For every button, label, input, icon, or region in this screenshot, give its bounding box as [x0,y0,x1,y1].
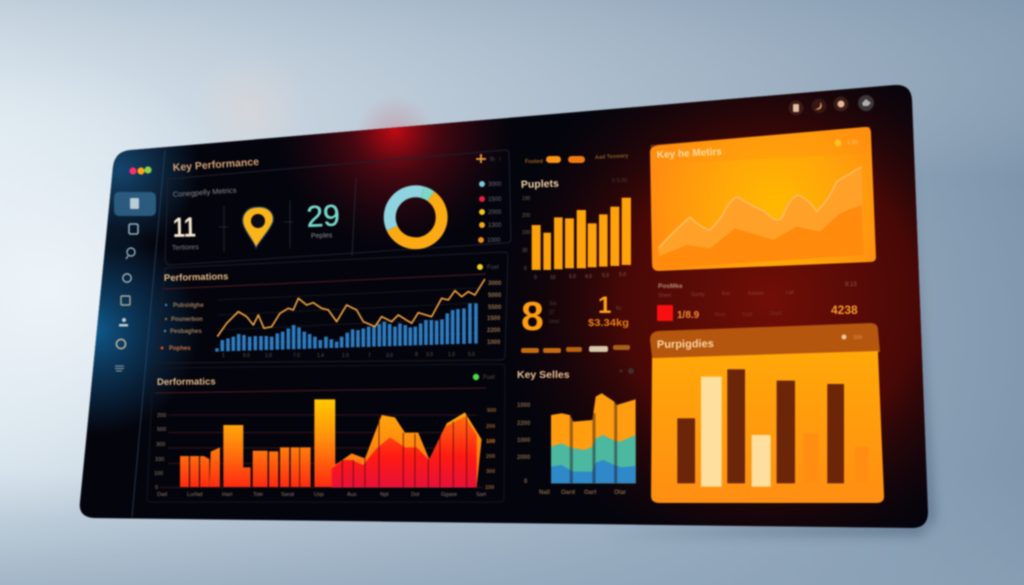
metric: 8: 8 [521,293,544,339]
y axis labels: 2000 [517,455,531,461]
y axis labels: 30 [522,248,528,254]
status: 100 [853,335,862,341]
y axis labels [487,281,502,346]
x axis labels: 7.0 [293,353,300,359]
top toolbar icons [476,154,501,163]
donut legend [478,181,502,244]
left axis labels: 0 [155,485,158,491]
left axis labels: 200 [157,413,166,419]
chart legend: Pubsidghe [173,303,204,309]
panel: performatics area and bar chart [147,364,505,502]
y axis labels [522,196,531,272]
heading: Purpigdies [657,338,714,351]
metric: 29 Peoples: 29 [306,199,341,234]
y axis labels: 2200 [487,328,501,334]
strip: positive stats: Kenner [748,291,764,297]
card: Purpigdies bar chart [650,323,884,503]
x axis labels: 3.0 [386,353,393,359]
top pill row: Aad Teswary [595,153,630,161]
strip: positive stats: PosMke [658,283,683,290]
x axis labels: 5.0 [602,273,609,279]
area layers [332,412,482,487]
nav icon: bell [123,274,131,282]
x axis labels: 0 [534,275,537,281]
left axis labels: 500 [157,427,166,433]
orange bars [180,399,335,487]
donut chart [390,191,442,243]
x axis labels: 10 [550,275,556,281]
strip: positive stats: 8:13 [845,282,857,288]
metric: 11 Territories [172,212,199,252]
x axis labels: Tole [253,492,263,498]
x axis labels: 3.0 [426,352,433,358]
x axis labels [157,492,487,498]
y axis labels: 1500 [487,316,501,322]
x axis labels: Dad [157,492,167,498]
heading: Performations [164,271,228,284]
right axis labels: 500 [487,408,496,414]
middle column [517,153,636,496]
y axis labels: 5000 [488,293,502,299]
x axis labels: 1.4 [317,353,324,359]
dashboard panel [78,84,929,529]
x axis labels: Lurfad [187,492,203,498]
x axis labels: 1.0 [265,353,272,359]
status [842,334,862,341]
metric: 8 [521,293,560,339]
status: Fuel [487,265,499,271]
mini icons [620,368,634,374]
subheading: Conegpelly Metrics [173,186,237,199]
red swatch [657,305,673,321]
y axis labels [517,403,531,485]
right axis labels: 100 [486,439,495,445]
nav icon: chart [129,224,138,234]
metric: 8: 27 [549,310,555,316]
sidebar divider [132,150,165,517]
status: Fuel [483,375,495,381]
status [477,264,499,271]
left axis labels: 100 [154,471,163,477]
x axis labels: 8 [415,352,418,358]
nav icon: clock [116,339,126,349]
nav icon: document [130,198,139,209]
top toolbar icons: ⁝ [499,157,501,163]
sidebar [114,166,156,371]
x axis labels: 1.0 [342,353,349,359]
y axis labels: 0 [524,479,528,485]
strip: positive stats: 4238 [831,303,858,317]
y axis labels: 0 [524,266,527,272]
chart legend: Pesbaghes [170,329,202,335]
right axis labels: 300 [486,469,495,475]
y axis labels: 5500 [488,305,502,311]
x axis labels: 5.0 [468,352,475,358]
top pill row: Fusted [525,159,543,165]
x axis labels: Dol [411,492,419,498]
strip: positive stats: Staft [742,312,753,318]
status [473,374,495,381]
right axis labels: 200 [486,424,495,430]
left axis labels [154,413,166,491]
top pill row [525,153,630,165]
mini legend: h 5.00 [612,178,627,184]
y axis labels: 1000 [487,340,501,346]
strip: positive stats: Esc [722,291,731,297]
strip: positive stats: Sturs [714,312,726,318]
metric: 1 $3.34kg: Fc [616,306,622,312]
x axis labels: 7 [368,353,371,359]
x axis labels: Usp [314,492,324,498]
status [834,140,858,146]
panel shadow [600,100,934,534]
strip: positive stats: Starlt [770,311,782,317]
y axis labels: 190 [522,196,531,202]
metric: 29 Peoples: Peples [311,232,333,240]
heading: Key Performance: Key Performance [172,156,260,174]
x axis labels [539,490,627,496]
x axis labels: Ggase [441,492,457,498]
heading: Key Selles: Key Selles [517,369,570,381]
y axis labels: 100 [522,230,531,236]
y axis labels: 3000 [488,281,502,287]
metric: 1 $3.34kg: 1 [598,292,611,319]
panel: category metrics [165,150,511,265]
x axis labels: 5.0 [243,353,250,359]
donut legend: 1300 [488,223,502,229]
x axis labels: 4.0 [585,274,592,280]
nav icon: image [121,296,130,305]
metric: 1 $3.34kg: $3.34kg [588,318,629,329]
blue bars and orange line [217,279,485,352]
pill row [521,345,630,353]
window dots [129,166,152,175]
x axis labels: 5.0 [569,274,576,280]
x axis labels: Npt [380,492,389,498]
y axis labels: 1000 [517,403,531,409]
metric: 11 Territories: Tertiores [172,244,199,252]
strip: positive stats: Lall [786,290,794,296]
strip: positive stats: Sheet [658,293,672,299]
heading: Key he Metirs [657,147,723,161]
x axis labels: Sarat [281,492,295,498]
metric: 8: Unst [549,319,560,325]
x axis labels: 1 [222,353,225,359]
metric: 1 $3.34kg [588,292,629,329]
x axis labels: Hart [222,492,233,498]
chart legend: Pounerbon [171,317,203,323]
x axis labels [534,272,626,281]
donut legend: 3000 [488,182,502,188]
y axis labels: 2200 [517,421,531,427]
donut legend: 1500 [488,197,502,203]
right axis labels: 100 [485,485,494,491]
x axis labels: Oart [584,490,596,496]
chart legend [160,303,204,352]
strip: positive stats [657,282,858,321]
x axis labels: Aus [347,492,357,498]
right axis labels [485,408,496,491]
right column [650,95,884,503]
icon: map pin [243,207,273,248]
donut legend: 2000 [488,210,502,216]
metric: 11 Territories: 11 [173,212,196,243]
panel: performance line and bar chart [156,252,508,363]
strip: positive stats: 1/8.9 [677,310,700,321]
x axis labels: Sart [476,492,487,498]
x axis labels: Oard [561,490,575,496]
right axis labels: 200 [486,454,495,460]
x axis labels: Olar [614,490,627,496]
amber bar chart [532,198,631,270]
heading: Derformatics [157,376,216,388]
active nav tile [114,192,156,216]
card: Key metrics area chart [650,127,876,271]
y axis labels: 1000 [517,438,531,444]
metric: 8: Sar [549,301,557,307]
strip: positive stats: Gurdy [691,292,705,298]
x axis labels: 1.0 [448,352,455,358]
x axis labels: Nall [539,490,550,496]
stacked area chart [551,393,636,483]
nav icon: menu [115,366,124,371]
left axis labels: 300 [156,442,165,448]
left axis labels: 330 [155,457,164,463]
status: 1.00 [847,140,858,146]
nav icon: user [119,318,128,326]
x axis labels: 5.0 [619,272,626,278]
x axis labels [222,352,475,359]
top toolbar icons: lh [490,157,495,163]
nav icon: search [126,248,135,259]
window controls [788,95,874,116]
donut legend: 1000 [487,238,501,244]
y axis labels: 200 [522,213,531,219]
chart legend: Pophes [169,346,191,352]
heading: Puplets: Puplets [521,178,559,191]
